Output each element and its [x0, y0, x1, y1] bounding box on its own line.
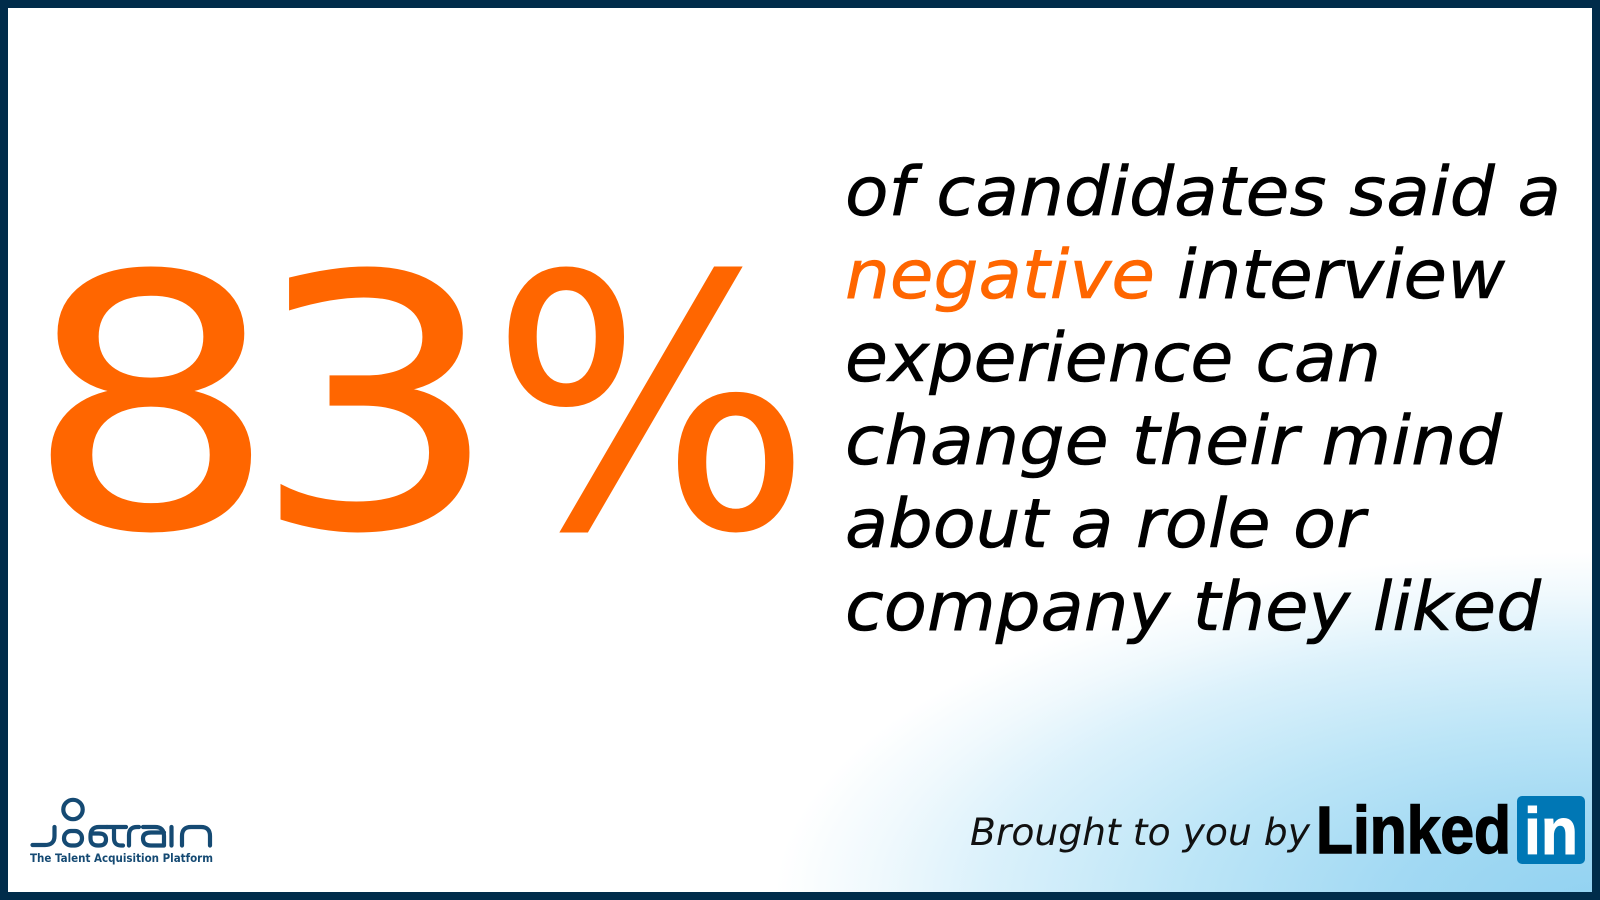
statement text: change their mind: [845, 402, 1503, 481]
linkedin logo: [1316, 793, 1585, 868]
statement text: [845, 153, 1561, 647]
jobtrain logo: [30, 800, 213, 865]
big number: 83%: 8: [25, 204, 277, 610]
statement text: interview: [1177, 236, 1505, 315]
linkedin wordmark: Linked: [1316, 793, 1511, 868]
big number: 83%: 3: [252, 204, 500, 610]
statement text: experience can: [845, 319, 1381, 398]
logo tagline: The Talent Acquisition Platform: [30, 851, 213, 865]
icon: jobtrain wordmark: [32, 800, 210, 846]
brought to you by: Brought to you by: [970, 811, 1311, 854]
big number: 83%: %: [491, 204, 811, 610]
linkedin badge: in: [1524, 794, 1578, 868]
statement text: of candidates said a: [845, 153, 1561, 232]
statement text: negative: [845, 236, 1155, 315]
statement text: company they liked: [845, 568, 1542, 647]
statement text: about a role or: [845, 485, 1369, 564]
